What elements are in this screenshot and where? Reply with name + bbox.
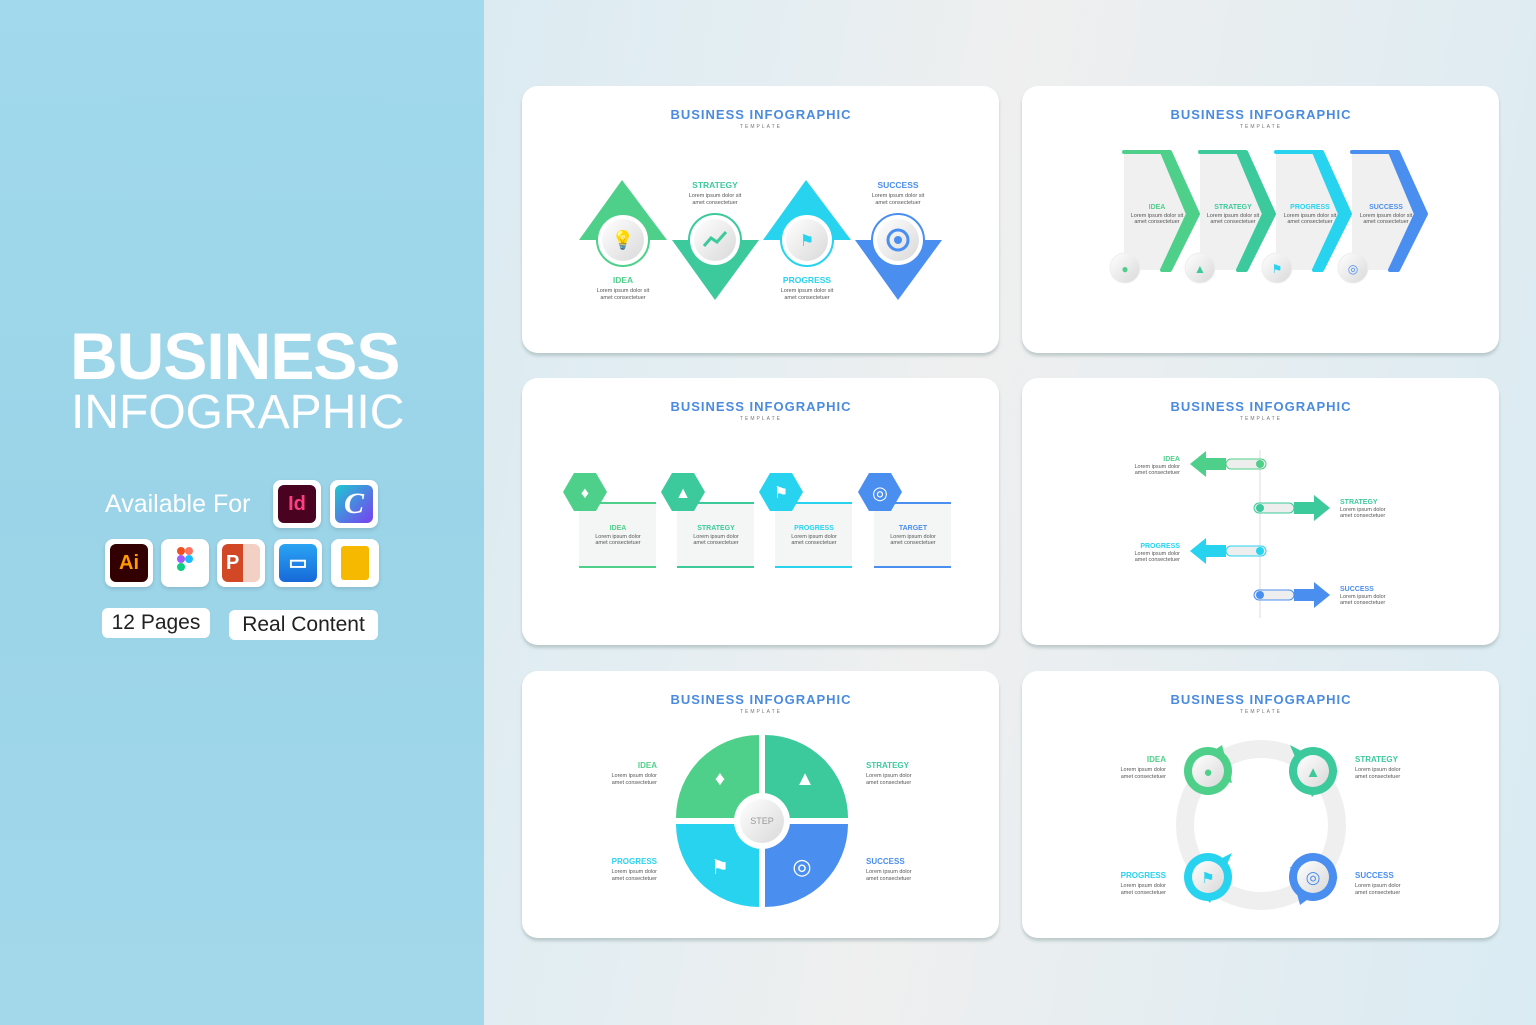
labels: Lorem ipsum dolor xyxy=(1355,883,1401,889)
quadrants xyxy=(676,735,848,907)
ring: ◎ xyxy=(1306,868,1320,887)
available for text: Available For xyxy=(105,490,250,518)
card title: TEMPLATE xyxy=(740,416,782,422)
chevron steps: Lorem ipsum dolor sit xyxy=(1207,213,1260,219)
chevron steps: amet consectetuer xyxy=(1134,219,1180,225)
ring: ● xyxy=(1203,764,1213,781)
card title: BUSINESS INFOGRAPHIC xyxy=(1170,399,1352,414)
card title xyxy=(670,399,852,422)
chevron steps: IDEA xyxy=(1149,204,1165,211)
labels: amet consectetuer xyxy=(1121,774,1166,780)
labels xyxy=(597,180,925,301)
hex steps: ◎ xyxy=(872,483,888,503)
pill: real content: Real Content xyxy=(242,613,365,636)
hex steps: amet consectetuer xyxy=(693,540,739,546)
hex steps: Lorem ipsum dolor xyxy=(890,534,936,540)
hex steps: Lorem ipsum dolor xyxy=(693,534,739,540)
icon: google slides xyxy=(331,539,379,587)
labels: Lorem ipsum dolor xyxy=(1355,767,1401,773)
subtitle: INFOGRAPHIC xyxy=(71,386,404,439)
hex steps: Lorem ipsum dolor xyxy=(595,534,641,540)
icon: powerpoint: P xyxy=(226,552,239,574)
timeline: IDEA xyxy=(1163,456,1180,463)
labels: PROGRESS xyxy=(1121,871,1167,880)
ring: ▲ xyxy=(1306,764,1320,781)
card 2: chevrons xyxy=(1022,86,1499,353)
timeline: amet consectetuer xyxy=(1340,600,1385,606)
quadrants: STEP xyxy=(750,816,774,826)
icon: canva: C xyxy=(344,487,364,520)
timeline: SUCCESS xyxy=(1340,586,1374,593)
labels: PROGRESS xyxy=(612,857,658,866)
card title: TEMPLATE xyxy=(1240,124,1282,130)
labels: Lorem ipsum dolor xyxy=(611,869,657,875)
hex steps: ▲ xyxy=(675,485,691,502)
timeline: amet consectetuer xyxy=(1135,470,1180,476)
labels: amet consectetuer xyxy=(1121,890,1166,896)
labels: Lorem ipsum dolor xyxy=(1120,883,1166,889)
up arrow idea: 💡 xyxy=(612,229,634,250)
labels: Lorem ipsum dolor xyxy=(866,869,912,875)
chevron steps: ● xyxy=(1121,262,1129,276)
timeline: STRATEGY xyxy=(1340,499,1378,506)
pill: 12 pages xyxy=(102,608,210,638)
chevron steps: Lorem ipsum dolor sit xyxy=(1284,213,1337,219)
hex steps: TARGET xyxy=(899,525,928,532)
card title: BUSINESS INFOGRAPHIC xyxy=(670,107,852,122)
labels: STRATEGY xyxy=(866,761,910,770)
icon: canva xyxy=(330,480,378,528)
icon: figma xyxy=(161,539,209,587)
card title: TEMPLATE xyxy=(1240,709,1282,715)
icon: keynote: ▭ xyxy=(289,552,307,574)
icon: powerpoint xyxy=(217,539,265,587)
hex steps: PROGRESS xyxy=(794,525,834,532)
labels: Lorem ipsum dolor sit xyxy=(872,193,925,199)
up arrow progress xyxy=(763,180,851,266)
card title: BUSINESS INFOGRAPHIC xyxy=(1170,107,1352,122)
labels: amet consectetuer xyxy=(866,876,911,882)
labels: IDEA xyxy=(613,275,633,285)
labels: Lorem ipsum dolor sit xyxy=(597,288,650,294)
up arrow idea xyxy=(579,180,667,266)
icon: illustrator xyxy=(105,539,153,587)
pill: real content xyxy=(229,610,378,640)
card 4: timeline arrows xyxy=(1022,378,1499,645)
card title: TEMPLATE xyxy=(740,709,782,715)
card title: BUSINESS INFOGRAPHIC xyxy=(670,692,852,707)
labels: PROGRESS xyxy=(783,275,831,285)
labels: amet consectetuer xyxy=(612,876,657,882)
hex steps: IDEA xyxy=(610,525,626,532)
card 3: hexagons xyxy=(522,378,999,645)
icon: indesign: Id xyxy=(288,493,306,515)
labels: amet consectetuer xyxy=(1355,774,1400,780)
down arrow strategy xyxy=(672,214,759,300)
quadrants: ◎ xyxy=(792,854,812,879)
icon: illustrator: Ai xyxy=(119,552,139,574)
card title: TEMPLATE xyxy=(1240,416,1282,422)
up arrow progress: ⚑ xyxy=(800,233,814,250)
quadrants: ▲ xyxy=(795,768,815,790)
labels xyxy=(611,761,912,882)
card title xyxy=(670,107,852,130)
chevron steps xyxy=(1110,152,1426,283)
labels: Lorem ipsum dolor xyxy=(866,773,912,779)
timeline: amet consectetuer xyxy=(1340,513,1385,519)
hex steps: ⚑ xyxy=(774,485,788,502)
hex steps: ♦ xyxy=(581,485,589,502)
labels: amet consectetuer xyxy=(875,200,921,206)
labels: Lorem ipsum dolor xyxy=(1120,767,1166,773)
labels: amet consectetuer xyxy=(600,295,646,301)
timeline: Lorem ipsum dolor xyxy=(1134,464,1180,470)
card title xyxy=(1170,692,1352,715)
labels: SUCCESS xyxy=(877,180,919,190)
card 6: ring cycle xyxy=(1022,671,1499,938)
hex steps: amet consectetuer xyxy=(890,540,936,546)
icon: indesign xyxy=(273,480,321,528)
labels: IDEA xyxy=(1147,755,1166,764)
timeline: Lorem ipsum dolor xyxy=(1134,551,1180,557)
labels: SUCCESS xyxy=(866,857,905,866)
labels: STRATEGY xyxy=(1355,755,1399,764)
timeline xyxy=(1134,450,1386,618)
hex steps: Lorem ipsum dolor xyxy=(791,534,837,540)
labels: Lorem ipsum dolor sit xyxy=(689,193,742,199)
timeline: Lorem ipsum dolor xyxy=(1340,507,1386,513)
pill: 12 pages: 12 Pages xyxy=(112,611,200,634)
labels: amet consectetuer xyxy=(612,780,657,786)
card title: BUSINESS INFOGRAPHIC xyxy=(1170,692,1352,707)
hex steps: STRATEGY xyxy=(697,525,735,532)
chevron steps: Lorem ipsum dolor sit xyxy=(1131,213,1184,219)
labels: amet consectetuer xyxy=(784,295,830,301)
timeline: PROGRESS xyxy=(1140,543,1180,550)
chevron steps: SUCCESS xyxy=(1369,204,1403,211)
labels: IDEA xyxy=(638,761,657,770)
ring: ⚑ xyxy=(1201,870,1215,887)
chevron steps: amet consectetuer xyxy=(1363,219,1409,225)
chevron steps: amet consectetuer xyxy=(1287,219,1333,225)
card 1: arrows xyxy=(522,86,999,353)
labels: amet consectetuer xyxy=(692,200,738,206)
chevron steps: Lorem ipsum dolor sit xyxy=(1360,213,1413,219)
quadrants: ♦ xyxy=(715,768,725,790)
labels xyxy=(1120,755,1401,896)
chevron steps: ◎ xyxy=(1348,262,1358,276)
down arrow success xyxy=(855,214,942,300)
quadrants: ⚑ xyxy=(711,857,729,879)
card title xyxy=(1170,399,1352,422)
hex steps: amet consectetuer xyxy=(595,540,641,546)
labels: Lorem ipsum dolor xyxy=(611,773,657,779)
hex steps: amet consectetuer xyxy=(791,540,837,546)
card title: TEMPLATE xyxy=(740,124,782,130)
chevron steps: amet consectetuer xyxy=(1210,219,1256,225)
card title xyxy=(1170,107,1352,130)
timeline: Lorem ipsum dolor xyxy=(1340,594,1386,600)
labels: STRATEGY xyxy=(692,180,738,190)
main title: BUSINESS xyxy=(70,319,399,393)
card title: BUSINESS INFOGRAPHIC xyxy=(670,399,852,414)
timeline: amet consectetuer xyxy=(1135,557,1180,563)
chevron steps: ⚑ xyxy=(1272,262,1282,276)
hex steps xyxy=(563,473,951,568)
labels: SUCCESS xyxy=(1355,871,1394,880)
chevron steps: ▲ xyxy=(1194,262,1206,276)
chevron steps: PROGRESS xyxy=(1290,204,1330,211)
card 5: quadrant circle xyxy=(522,671,999,938)
card title xyxy=(670,692,852,715)
labels: amet consectetuer xyxy=(1355,890,1400,896)
left panel xyxy=(0,0,484,1025)
labels: Lorem ipsum dolor sit xyxy=(781,288,834,294)
chevron steps: STRATEGY xyxy=(1214,204,1252,211)
labels: amet consectetuer xyxy=(866,780,911,786)
ring xyxy=(1184,745,1338,905)
icon: keynote xyxy=(274,539,322,587)
